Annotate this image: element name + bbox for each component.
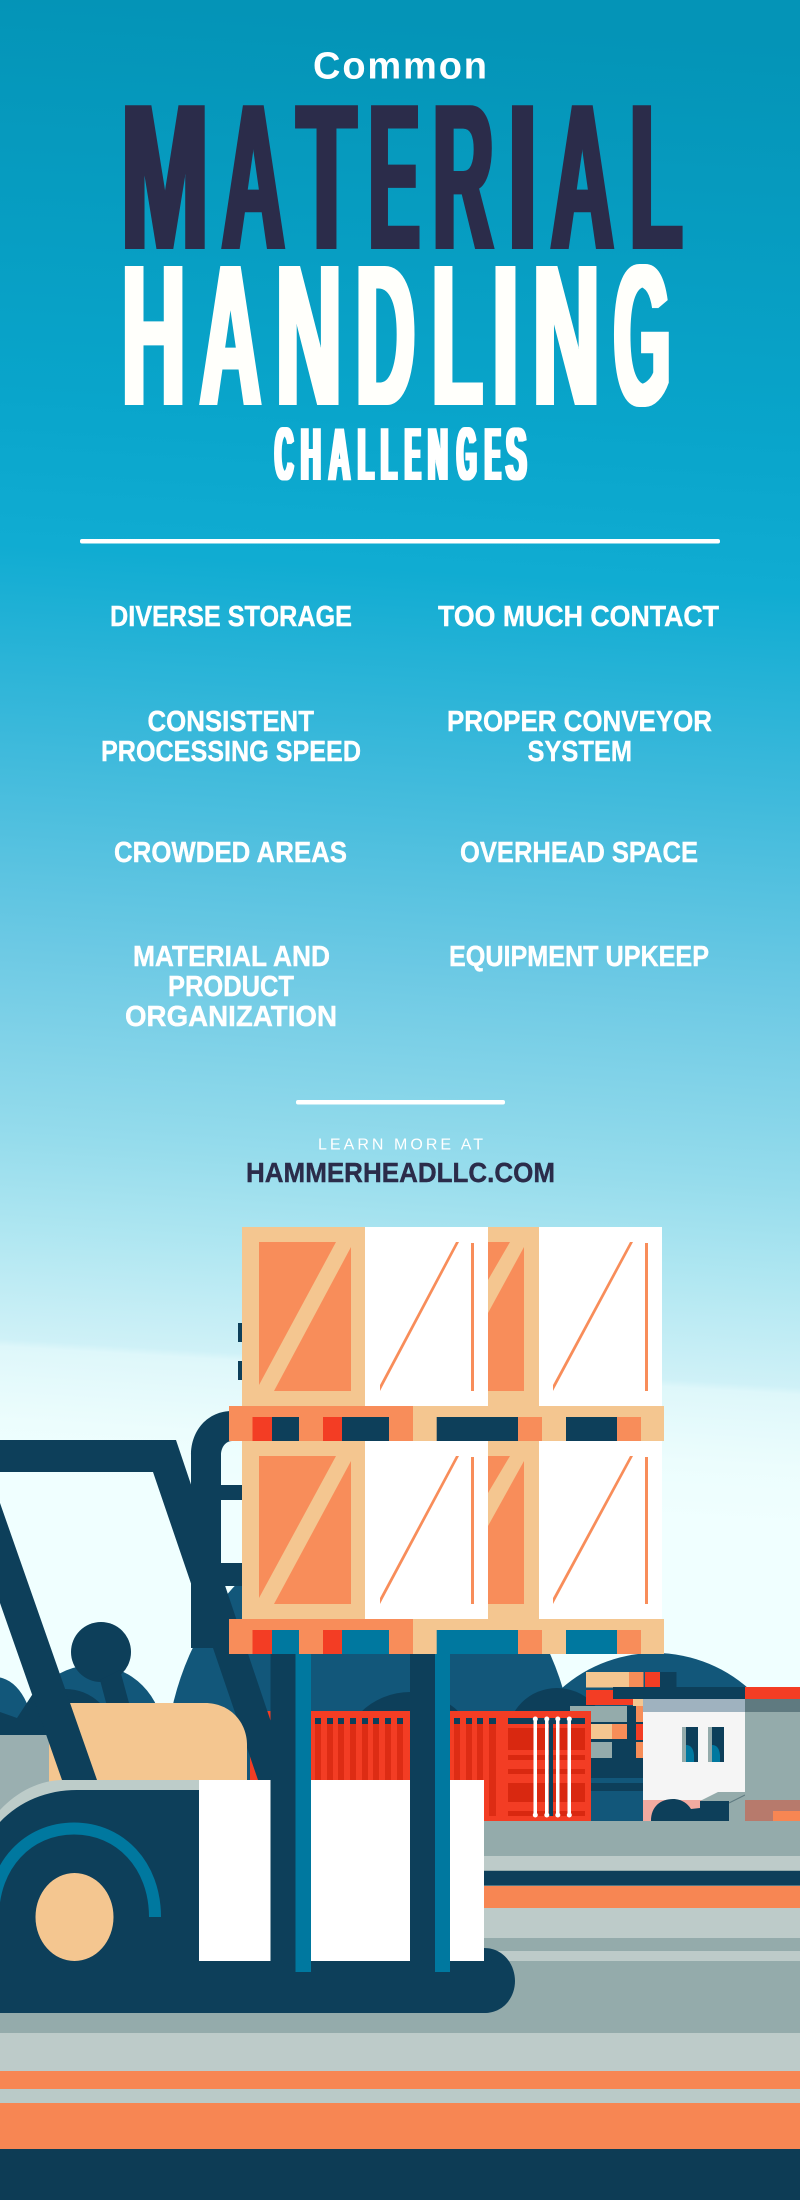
window right xyxy=(708,1727,724,1762)
list of challenges xyxy=(101,601,719,1033)
item: consistent processing speed xyxy=(101,706,361,768)
title: Material xyxy=(121,61,683,294)
ground xyxy=(0,1821,800,2200)
forklift cab frame and mast xyxy=(0,1323,271,1780)
title: Challenges xyxy=(274,413,528,497)
crate middle xyxy=(488,1441,539,1619)
top divider xyxy=(80,539,720,544)
item: material and product organization: PRODUCT xyxy=(168,971,294,1003)
title: Material: T xyxy=(297,61,356,294)
hood highlight xyxy=(0,1780,205,1830)
fork post right xyxy=(410,1654,450,1972)
title: Challenges: H xyxy=(301,413,321,497)
forklift forks and white panels xyxy=(199,1654,484,1972)
wheel arch xyxy=(0,1828,155,1917)
item: proper conveyor system: SYSTEM xyxy=(528,736,632,768)
title: Challenges: E xyxy=(484,413,500,497)
forklift driver xyxy=(71,1622,131,1710)
white panel xyxy=(365,1441,488,1619)
background hills xyxy=(0,1524,796,2022)
window left xyxy=(682,1727,698,1762)
title: Material: M xyxy=(121,61,209,294)
forklift body xyxy=(0,1780,515,2013)
item: material and product organization: ORGANIZATION xyxy=(125,1001,337,1033)
white panel right xyxy=(539,1441,662,1619)
lower divider xyxy=(296,1100,505,1104)
item: consistent processing speed: CONSISTENT xyxy=(148,706,314,738)
white panel right xyxy=(539,1227,662,1406)
title: Handling: D xyxy=(356,222,415,448)
item: proper conveyor system: PROPER CONVEYOR xyxy=(447,706,712,738)
item: material and product organization: MATERIAL AND xyxy=(133,941,330,973)
fork post left xyxy=(270,1654,311,1972)
red container sliver xyxy=(250,1760,258,1782)
cargo: upper pallet xyxy=(229,1406,664,1441)
cab roof and front pillar xyxy=(0,1440,271,1780)
title: Handling: G xyxy=(614,222,670,448)
title: Handling: N xyxy=(532,222,599,448)
wheel hub xyxy=(36,1873,114,1961)
gray wall behind forklift xyxy=(0,1735,49,1825)
title: Challenges: C xyxy=(275,413,293,497)
forklift seat xyxy=(49,1703,247,1782)
title: Challenges: N xyxy=(428,413,448,497)
building doorway shapes xyxy=(651,1799,729,1821)
item: overhead space: OVERHEAD SPACE xyxy=(460,837,698,869)
crate left xyxy=(242,1227,365,1406)
title: Challenges: L xyxy=(381,413,397,497)
mast rungs xyxy=(221,1485,242,1586)
title: Challenges: G xyxy=(457,413,476,497)
title: Material: R xyxy=(433,61,494,294)
title: Material: A xyxy=(551,61,614,294)
title: Handling: N xyxy=(276,222,341,448)
body shell xyxy=(0,1790,515,2013)
title: Material: L xyxy=(630,61,682,294)
item: equipment upkeep: EQUIPMENT UPKEEP xyxy=(449,941,709,973)
title: Challenges: E xyxy=(404,413,420,497)
title: Challenges: S xyxy=(506,413,526,497)
title: Challenges: A xyxy=(329,413,350,497)
driver neck xyxy=(100,1670,129,1710)
cargo: lower pallet xyxy=(229,1619,664,1654)
container door bars xyxy=(533,1716,572,1818)
item: consistent processing speed: PROCESSING SPEED xyxy=(101,736,361,768)
title: Challenges: L xyxy=(358,413,374,497)
white building xyxy=(613,1687,800,1821)
item: material and product organization xyxy=(125,941,337,1033)
title: Material: I xyxy=(508,61,537,294)
mast ticks xyxy=(238,1323,242,1380)
crate left xyxy=(242,1441,365,1619)
stacked warehouse blocks xyxy=(570,1672,676,1821)
item: too much contact: TOO MUCH CONTACT xyxy=(438,601,719,633)
title: Handling: L xyxy=(432,222,482,448)
learn more label: LEARN MORE AT xyxy=(318,1136,483,1154)
crate middle xyxy=(488,1227,539,1406)
title: Material: A xyxy=(222,61,285,294)
cargo: upper row of crates xyxy=(242,1227,662,1406)
title: Handling xyxy=(122,222,670,448)
shipping container xyxy=(250,1711,591,1821)
white panel xyxy=(365,1227,488,1406)
title: Handling: A xyxy=(200,222,261,448)
mast rail xyxy=(191,1411,232,1648)
title: Handling: H xyxy=(122,222,185,448)
item: crowded areas: CROWDED AREAS xyxy=(114,837,347,869)
item: diverse storage: DIVERSE STORAGE xyxy=(110,601,352,633)
title: Common: Common xyxy=(313,46,487,88)
cargo: lower row of crates xyxy=(242,1441,662,1619)
title: Material: E xyxy=(369,61,419,294)
driver head xyxy=(71,1622,131,1682)
website url: HAMMERHEADLLC.COM xyxy=(246,1157,555,1188)
title: Handling: I xyxy=(492,222,518,448)
item: proper conveyor system xyxy=(447,706,712,768)
forklift rear pillar xyxy=(0,1503,97,1780)
